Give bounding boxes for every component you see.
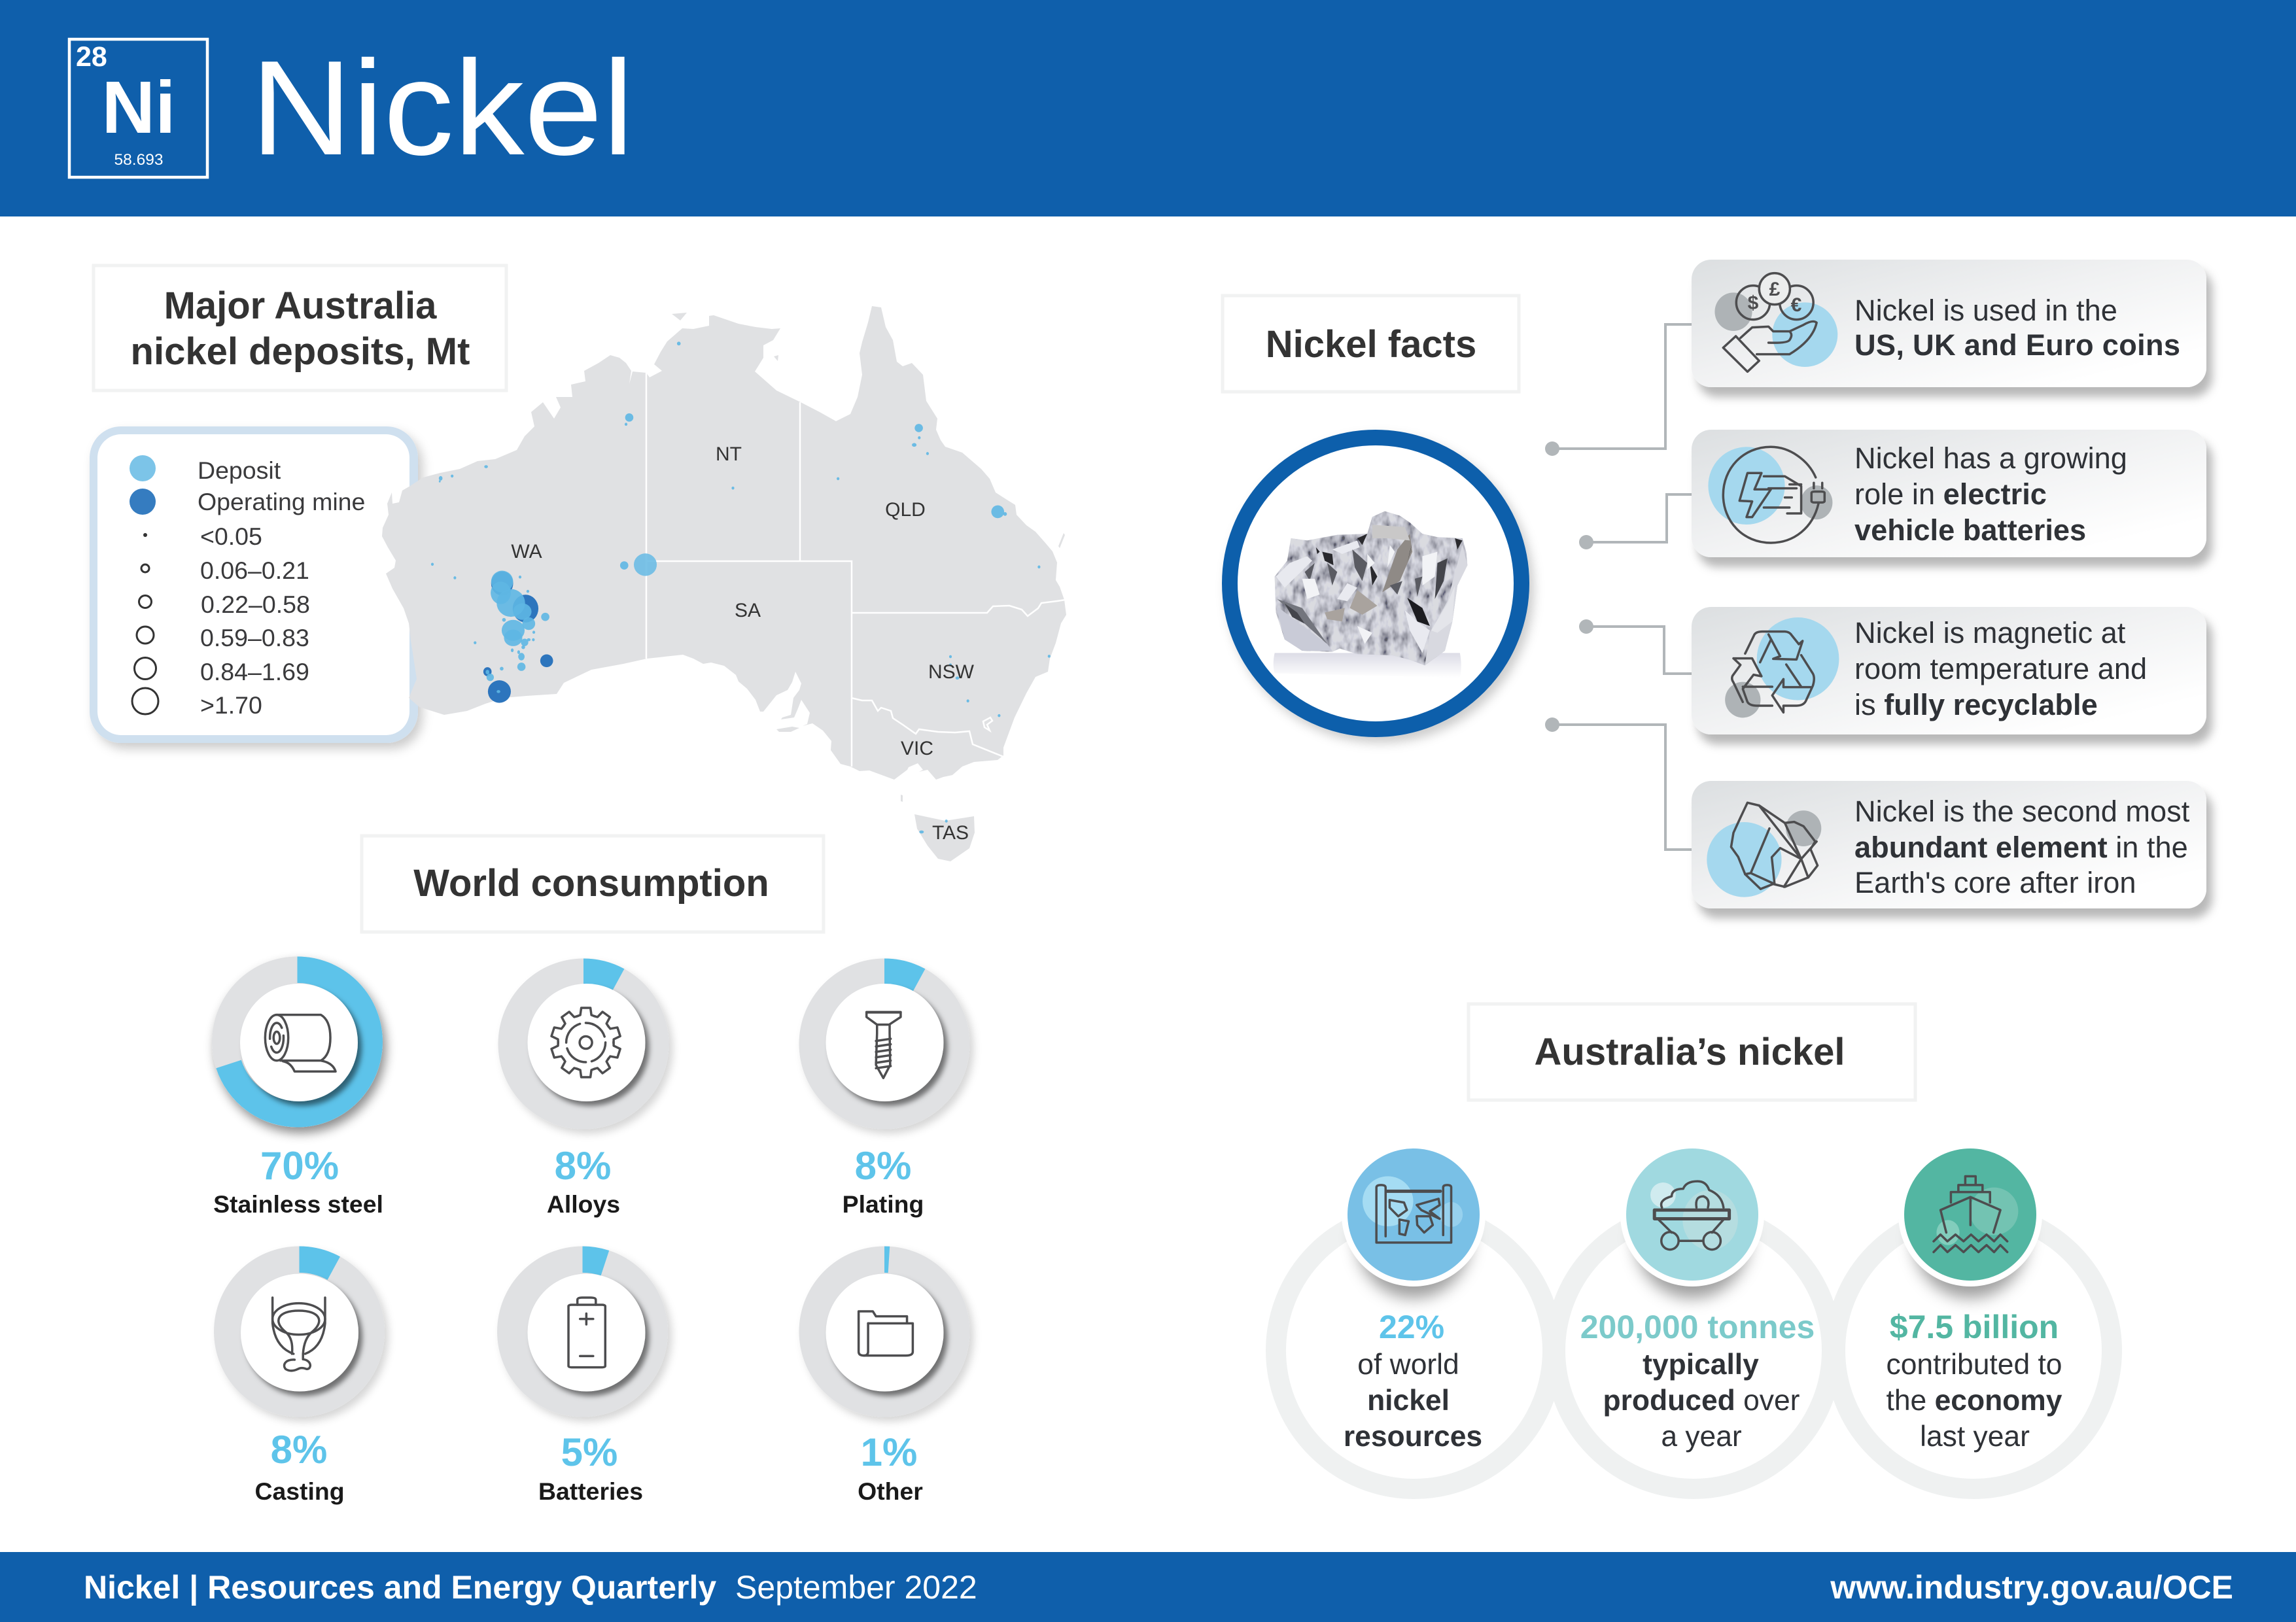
icon: crucible <box>273 1298 325 1371</box>
periodic table tile: 58.693 <box>114 151 163 169</box>
map of Australia <box>382 306 1066 861</box>
legend contents: 0.06–0.21 <box>200 557 309 584</box>
donut: batteries 5%: 5% <box>561 1430 617 1474</box>
fact card: electric vehicle: role in electric <box>1854 477 2047 511</box>
icon: EV plug <box>1708 447 1832 543</box>
connector dots <box>1545 441 1593 732</box>
icon: folder <box>859 1311 913 1356</box>
fact card: electric vehicle: Nickel has a growing <box>1854 441 2127 475</box>
stat: tonnes: typically <box>1643 1349 1759 1381</box>
stat: economy: contributed to <box>1887 1349 2062 1381</box>
state labels: TAS <box>932 822 969 844</box>
donut: stainless steel 70%: 70% <box>260 1144 339 1188</box>
state labels: NT <box>716 443 742 465</box>
icon: mine cart <box>1650 1181 1738 1250</box>
mainland <box>382 306 1066 780</box>
stat: world resources <box>1342 1143 1486 1453</box>
fact card: abundant <box>1692 781 2206 908</box>
donut: stainless steel 70%: Stainless steel <box>213 1190 383 1218</box>
nickel ring with rock photo <box>1230 438 1522 729</box>
stat: world resources: 22% <box>1379 1309 1444 1345</box>
footer band: September 2022 <box>735 1569 977 1606</box>
donut: plating 8% <box>799 959 969 1218</box>
icon: roll <box>265 1015 336 1071</box>
icon: map scroll <box>1363 1176 1463 1243</box>
donut: alloys 8% <box>498 959 669 1218</box>
stat: economy: the economy <box>1887 1385 2062 1417</box>
legend contents: Deposit <box>198 457 281 484</box>
donut: batteries 5%: Batteries <box>538 1477 643 1505</box>
stat: economy <box>1887 1143 2062 1453</box>
donut: batteries 5% <box>497 1247 668 1505</box>
legend contents <box>130 455 365 719</box>
title: Nickel <box>251 33 634 183</box>
fact card: abundant: Nickel is the second most <box>1854 795 2190 828</box>
state borders <box>646 373 1066 767</box>
periodic table tile: Ni <box>102 66 175 148</box>
ring outlines <box>1276 1213 2112 1489</box>
stat: world resources: resources <box>1344 1421 1482 1453</box>
donut: casting 8%: Casting <box>254 1477 345 1505</box>
heading: deposits: nickel deposits, Mt <box>131 330 470 373</box>
donut: casting 8% <box>214 1247 385 1505</box>
stat: tonnes: 200,000 tonnes <box>1580 1309 1815 1345</box>
nickel rock <box>1274 511 1467 678</box>
legend frame <box>90 426 418 743</box>
state labels: QLD <box>885 499 926 521</box>
footer band: www.industry.gov.au/OCE <box>1830 1569 2233 1606</box>
legend contents: 0.59–0.83 <box>200 624 309 651</box>
deposit markers <box>431 341 1051 833</box>
icon: recycle <box>1725 617 1839 717</box>
state labels: WA <box>511 541 542 562</box>
donut: plating 8%: 8% <box>855 1144 911 1188</box>
state labels: VIC <box>901 738 933 759</box>
header band <box>0 0 2296 216</box>
stat: economy: $7.5 billion <box>1890 1309 2059 1345</box>
fact card: recyclable: room temperature and <box>1854 652 2147 685</box>
stat: tonnes: a year <box>1661 1421 1742 1453</box>
donut: casting 8%: 8% <box>271 1428 327 1472</box>
state labels <box>511 443 975 844</box>
heading: world consumption <box>362 836 824 932</box>
stat: tonnes: produced over <box>1603 1385 1800 1417</box>
connector lines <box>1552 324 1692 850</box>
icon: battery <box>568 1298 605 1368</box>
heading: nickel facts: Nickel facts <box>1266 323 1476 366</box>
stat: tonnes <box>1580 1143 1815 1453</box>
fact card: recyclable <box>1692 607 2206 734</box>
fact card: coins: Nickel is used in the <box>1854 294 2117 327</box>
fact card: electric vehicle <box>1692 430 2206 557</box>
fact card: recyclable: is fully recyclable <box>1854 688 2098 721</box>
donut: other 1%: Other <box>858 1477 923 1505</box>
legend contents: 0.84–1.69 <box>200 658 309 685</box>
footer band <box>0 1552 2296 1622</box>
legend contents: 0.22–0.58 <box>201 591 310 618</box>
heading: nickel facts <box>1223 296 1519 392</box>
stat: world resources: nickel <box>1367 1385 1450 1417</box>
donut: plating 8%: Plating <box>843 1190 924 1218</box>
heading: Australia's nickel: Australia’s nickel <box>1535 1031 1845 1073</box>
donut: other 1%: 1% <box>861 1430 917 1474</box>
fact card: abundant: Earth's core after iron <box>1854 866 2136 899</box>
islands <box>672 313 1065 802</box>
heading: world consumption: World consumption <box>413 862 769 905</box>
deposits <box>431 341 1051 833</box>
icon: coins in hand <box>1714 273 1837 371</box>
heading: Australia's nickel <box>1469 1004 1915 1100</box>
periodic table tile: 28 <box>76 41 107 73</box>
fact card: coins <box>1692 260 2206 387</box>
icon: gear <box>550 1008 621 1077</box>
footer band: Nickel | Resources and Energy Quarterly <box>84 1569 716 1606</box>
heading: deposits: Major Australia <box>164 285 437 327</box>
legend contents: <0.05 <box>200 523 262 550</box>
icon: ship <box>1934 1176 2018 1252</box>
stat: economy: last year <box>1920 1421 2030 1453</box>
fact card: abundant: abundant element in the <box>1854 831 2188 864</box>
fact card: coins: € <box>1791 294 1802 316</box>
donut: alloys 8%: 8% <box>555 1144 611 1188</box>
legend contents: >1.70 <box>200 691 262 719</box>
fact card: coins: $ <box>1748 292 1759 314</box>
icon: screw <box>867 1012 901 1078</box>
heading: deposits <box>94 266 506 390</box>
state labels: SA <box>735 600 761 621</box>
fact card: coins: £ <box>1769 279 1781 300</box>
donut: other 1% <box>799 1247 969 1505</box>
donut: alloys 8%: Alloys <box>547 1190 620 1218</box>
operating mines <box>483 572 553 703</box>
donut: stainless steel 70% <box>212 956 383 1218</box>
fact card: electric vehicle: vehicle batteries <box>1854 513 2086 547</box>
periodic table tile <box>69 39 207 177</box>
legend contents: Operating mine <box>198 488 365 515</box>
Tasmania <box>914 814 975 861</box>
fact card: coins: US, UK and Euro coins <box>1854 328 2180 362</box>
stat: world resources: of world <box>1357 1349 1459 1381</box>
icon: rock <box>1707 802 1821 897</box>
state labels: NSW <box>928 661 975 683</box>
fact card: recyclable: Nickel is magnetic at <box>1854 616 2126 649</box>
metallic texture <box>1275 511 1467 665</box>
